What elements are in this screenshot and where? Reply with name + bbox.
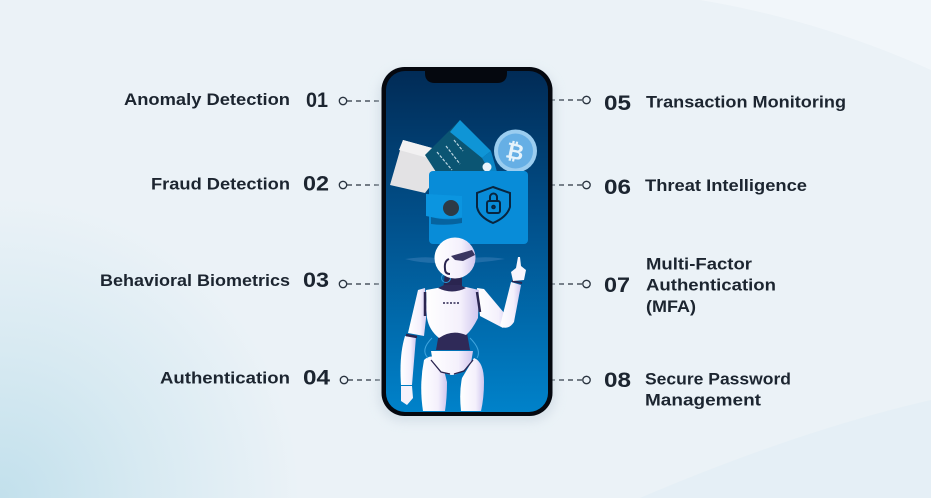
right labels (645, 94, 846, 410)
right labels: Secure Password (645, 370, 791, 388)
right labels: Management (645, 392, 762, 410)
wallet clasp (431, 217, 462, 225)
left numbers: 03 (303, 269, 329, 292)
bitcoin coin (494, 130, 537, 172)
neck (443, 272, 462, 291)
left labels: Anomaly Detection (124, 91, 290, 109)
left numbers: 04 (303, 366, 330, 390)
robot (400, 238, 526, 411)
right labels: Threat Intelligence (645, 177, 807, 195)
notch (425, 71, 507, 83)
right labels: Transaction Monitoring (646, 94, 846, 112)
right labels: Multi-Factor (646, 256, 753, 274)
connectors (339, 96, 590, 384)
right numbers: 06 (604, 176, 631, 199)
torso (426, 287, 479, 338)
shield lock icon (477, 187, 510, 223)
left numbers: 02 (303, 172, 329, 196)
wallet and cards (390, 120, 537, 244)
left arm (408, 288, 427, 336)
left labels: Behavioral Biometrics (100, 272, 290, 290)
head (434, 238, 476, 278)
left labels: Fraud Detection (151, 176, 290, 194)
left labels: Authentication (160, 370, 290, 388)
bitcoin coin: ₿ (504, 137, 526, 166)
right numbers: 05 (604, 92, 631, 115)
bank card (425, 120, 497, 172)
right numbers (604, 92, 631, 392)
phone (378, 67, 556, 422)
right labels: (MFA) (646, 298, 696, 316)
legs (421, 356, 447, 411)
right labels: Authentication (646, 276, 776, 294)
paper card (390, 140, 441, 193)
waist (436, 331, 470, 350)
left numbers (303, 89, 330, 390)
left numbers: 01 (306, 89, 328, 112)
left labels (100, 91, 290, 388)
wallet body (429, 171, 528, 244)
right arm (477, 288, 510, 328)
right numbers: 08 (604, 369, 631, 392)
right numbers: 07 (604, 274, 630, 297)
pelvis (431, 351, 473, 375)
